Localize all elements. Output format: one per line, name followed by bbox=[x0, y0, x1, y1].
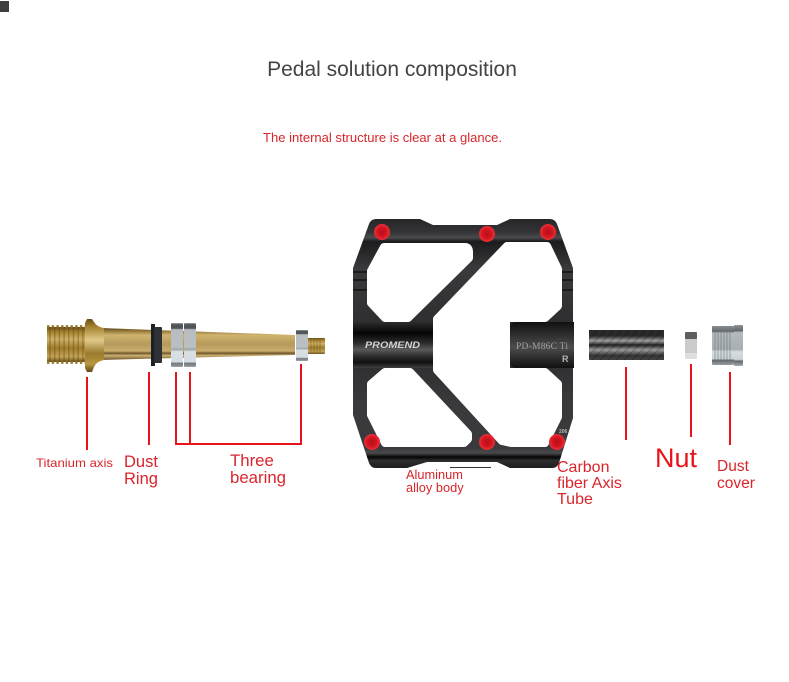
axle tip thread bbox=[307, 338, 325, 354]
bearing 3 bbox=[296, 330, 308, 361]
label: aluminum alloy body: Aluminum bbox=[406, 467, 463, 482]
label: nut: Nut bbox=[655, 443, 698, 473]
right hub bbox=[510, 322, 574, 368]
bearing 1 bbox=[171, 323, 183, 367]
small mark: 206 bbox=[559, 429, 568, 435]
corner mark bbox=[0, 1, 9, 12]
label: three bearing: bearing bbox=[230, 468, 286, 487]
label: carbon fiber axis tube: fiber Axis bbox=[557, 475, 622, 492]
title: Pedal solution composition bbox=[267, 58, 517, 81]
label: dust cover: Dust bbox=[717, 458, 749, 475]
red bolts bbox=[364, 224, 565, 450]
left hub bbox=[353, 322, 433, 368]
label: dust ring: Dust bbox=[124, 453, 158, 471]
label: three bearing: Three bbox=[230, 451, 274, 470]
bearing 2 bbox=[184, 323, 196, 367]
leader lines bbox=[87, 364, 730, 450]
nut bbox=[685, 332, 697, 359]
label: titanium axis: Titanium axis bbox=[36, 456, 113, 470]
subtitle: The internal structure is clear at a glance. bbox=[263, 130, 502, 145]
brand logo text: PROMEND bbox=[365, 340, 420, 351]
label: carbon fiber axis tube: Tube bbox=[557, 491, 593, 508]
label: aluminum alloy body: alloy body bbox=[406, 480, 464, 495]
side letter: R bbox=[562, 354, 569, 364]
carbon fiber tube bbox=[589, 330, 664, 360]
side grooves bbox=[353, 272, 573, 290]
label: dust cover: cover bbox=[717, 475, 755, 492]
axle shaft bbox=[100, 328, 295, 360]
frame windows bbox=[371, 246, 558, 443]
label: carbon fiber axis tube: Carbon bbox=[557, 459, 609, 476]
label: dust ring: Ring bbox=[124, 470, 158, 488]
dust ring bbox=[151, 324, 162, 366]
dust cover bbox=[712, 325, 743, 366]
pedal body bbox=[353, 219, 574, 468]
model text: PD-M86C Ti bbox=[516, 342, 568, 352]
axle flange bbox=[85, 319, 104, 372]
underline near body label bbox=[450, 467, 491, 468]
titanium axle assembly bbox=[47, 319, 325, 372]
axle thread bbox=[47, 326, 85, 363]
